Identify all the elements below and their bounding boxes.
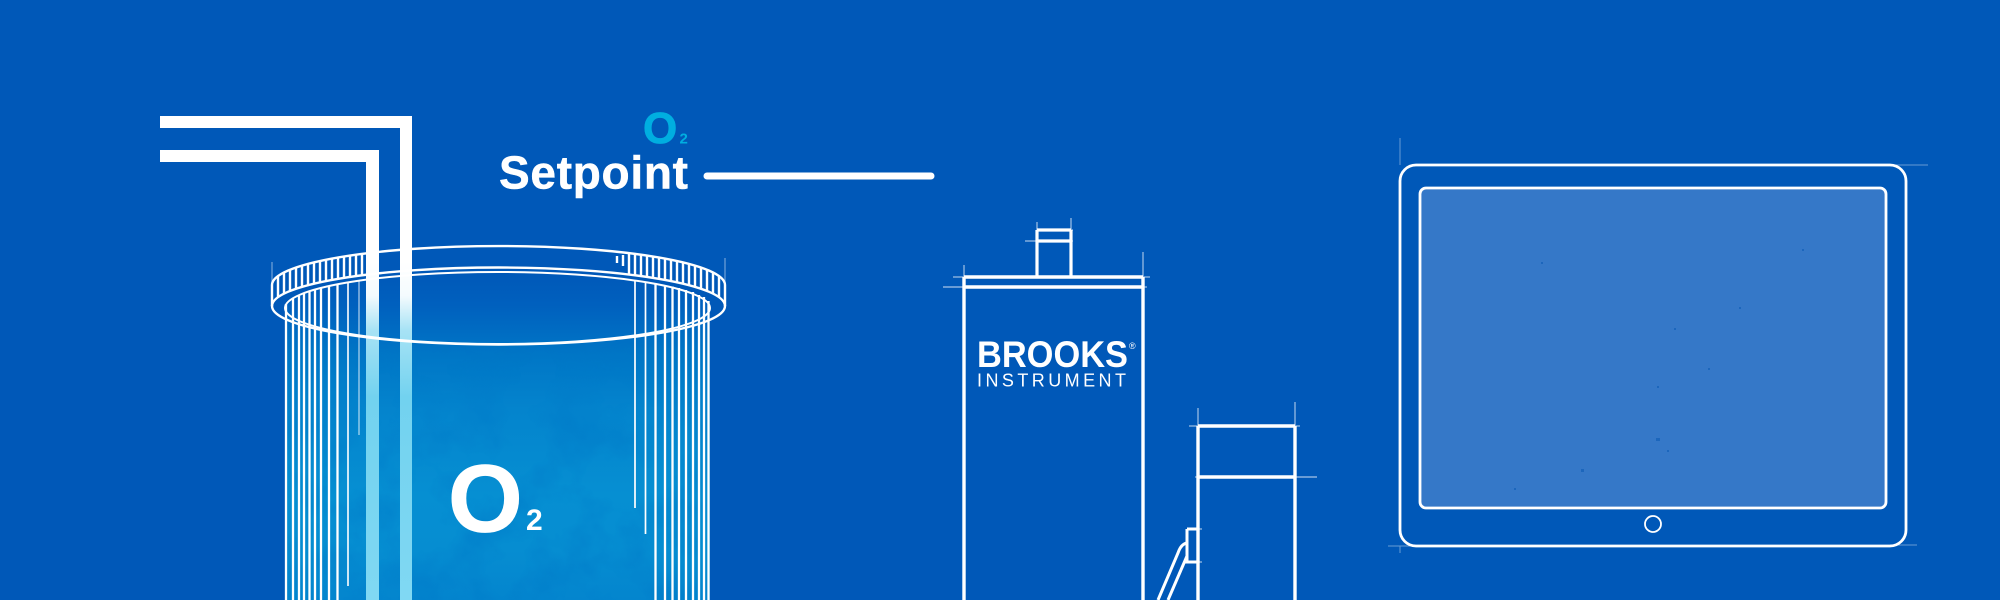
tablet screen: [1420, 188, 1886, 508]
tank vertical lines left: [286, 281, 359, 600]
tank liquid: [287, 305, 710, 600]
tank vertical lines right: [635, 280, 708, 600]
small O2 icon: 2: [680, 130, 688, 148]
small O2 icon: O: [643, 104, 677, 153]
tablet sketch guide lines: [1388, 138, 1928, 553]
Brooks logo: BROOKS: [977, 334, 1128, 375]
gas pipes: [160, 116, 412, 600]
tablet body: [1400, 165, 1906, 546]
tank rim: [272, 246, 725, 344]
tablet home button: [1645, 516, 1661, 532]
setpoint word: Setpoint: [499, 146, 688, 198]
screen specks: [1514, 249, 1804, 490]
second unit overshoot lines: [1189, 402, 1317, 562]
Brooks logo: INSTRUMENT: [977, 370, 1126, 390]
controller unit with logo: [943, 218, 1150, 600]
O2 tank label: 2: [526, 504, 543, 537]
setpoint label: [499, 104, 931, 198]
tank with oxygen: [160, 116, 725, 600]
rim ticks right: [617, 253, 719, 297]
second unit body: [1158, 426, 1295, 600]
O2 tank label: O: [448, 446, 523, 552]
second unit with tube: [1158, 402, 1317, 600]
Brooks logo: ®: [1129, 341, 1136, 351]
controller body sketch: [964, 230, 1143, 600]
controller sketch overshoot lines: [943, 218, 1150, 287]
tablet: [1388, 138, 1928, 553]
setpoint connector line: [707, 172, 931, 180]
rim ticks left: [278, 254, 362, 297]
